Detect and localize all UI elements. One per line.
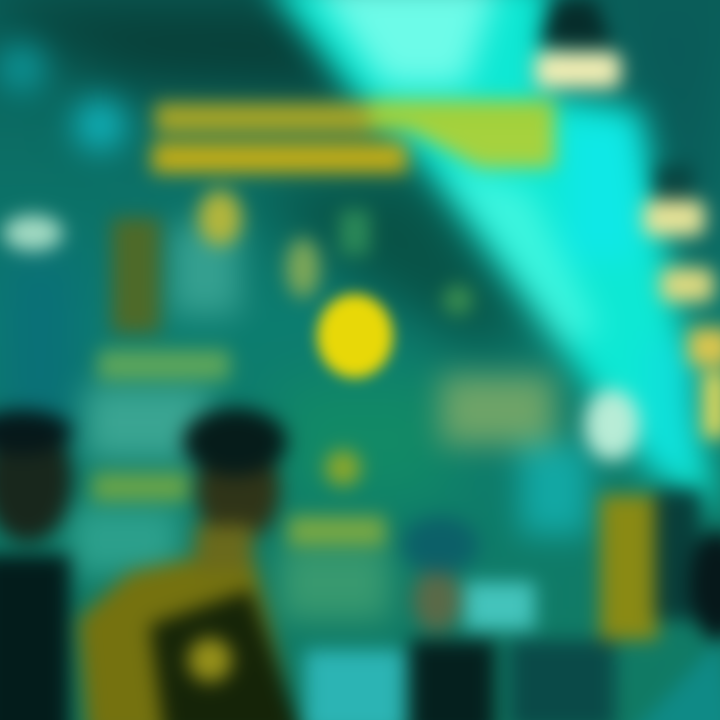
yellow circle sign (317, 294, 393, 378)
teal panels (0, 44, 590, 620)
hanging lamps (3, 0, 720, 461)
small green signs (92, 190, 473, 546)
ceiling shade (0, 0, 720, 500)
cyan light beam (265, 0, 715, 510)
yellow banner (152, 100, 555, 173)
person left (0, 410, 72, 720)
people right (305, 490, 720, 720)
person centre with yellow jacket (78, 408, 305, 720)
